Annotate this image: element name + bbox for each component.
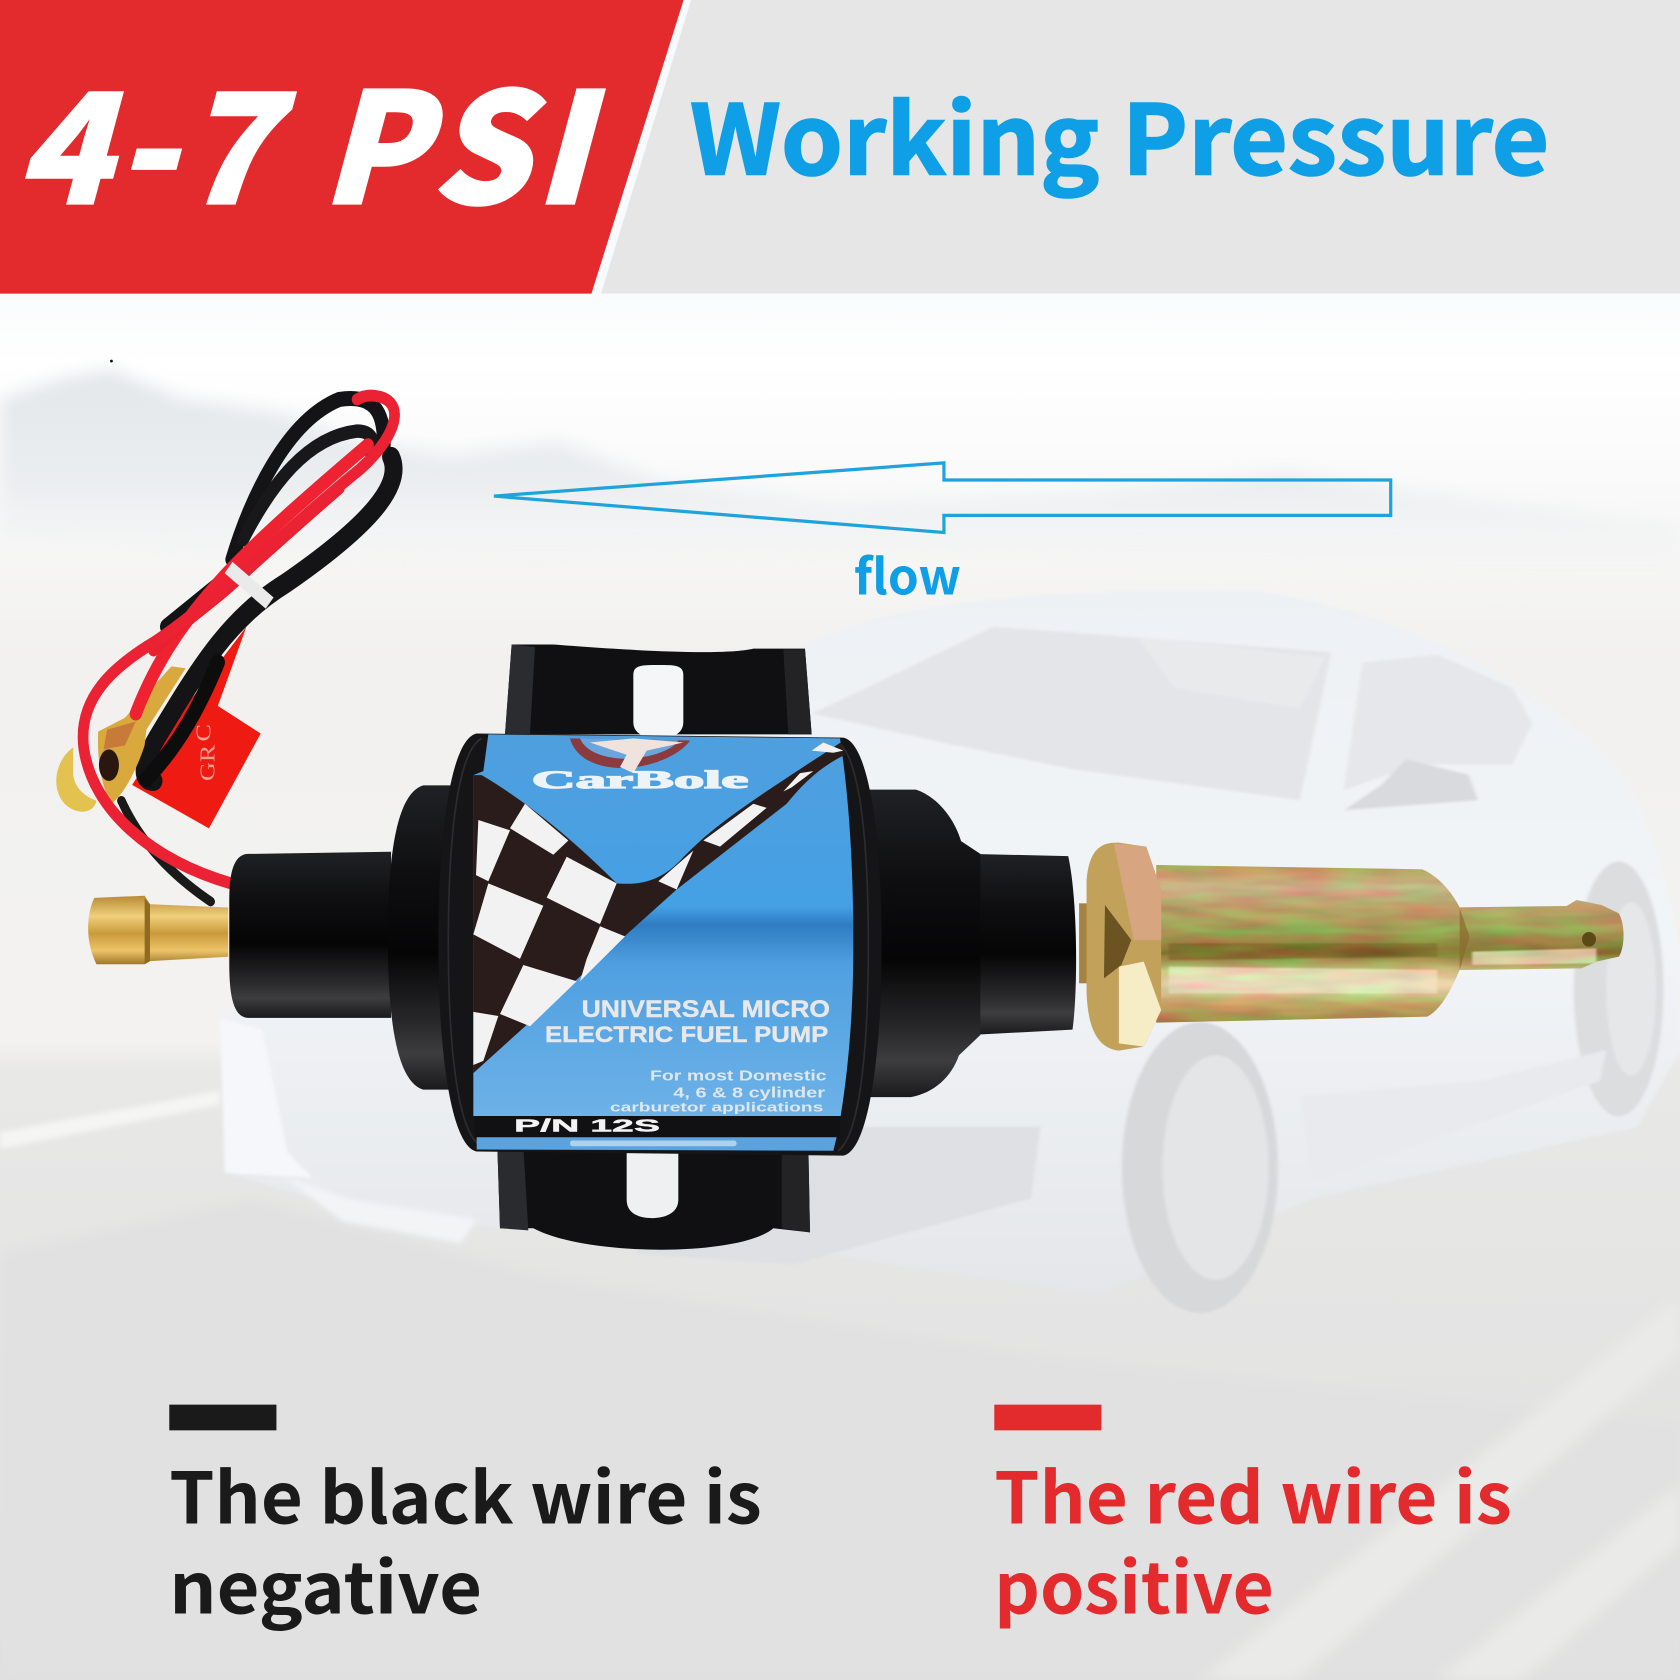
car silhouette: [220, 590, 1680, 1313]
thread: [1079, 903, 1106, 983]
car front white: [220, 1018, 312, 1178]
part number band: P/N 12S: [514, 1117, 660, 1136]
crimp terminal: [98, 666, 186, 803]
white diagonal gap: [591, 0, 691, 294]
legend: red wire: positive: [994, 1533, 1274, 1635]
top bracket: [505, 645, 812, 738]
flag base: [473, 742, 845, 1073]
flow arrow: [494, 463, 1391, 532]
inlet body: [229, 852, 391, 1018]
windshield: [812, 627, 1331, 800]
right collar and neck: [836, 790, 1076, 1097]
product title: [545, 995, 830, 1048]
speck: [110, 360, 113, 362]
ring terminal: [56, 747, 96, 812]
side window: [1344, 655, 1532, 790]
road lane stripes: [1200, 1296, 1680, 1680]
legend: black wire: The black wire is: [169, 1443, 762, 1545]
cable tie: [229, 567, 270, 603]
red badge: [0, 0, 684, 294]
filter can and stem: [1156, 865, 1624, 1023]
front splitter: [284, 1176, 477, 1243]
emblem: [570, 738, 690, 773]
legend: red wire: [994, 1405, 1512, 1635]
product note: 4, 6 & 8 cylinder: [673, 1085, 826, 1101]
road stripes left: [0, 1198, 1680, 1680]
mirror: [1344, 759, 1478, 810]
side sill: [1300, 1050, 1606, 1183]
bottom bracket: [497, 1147, 810, 1250]
cylinder rims: [438, 734, 882, 1156]
thin black lead: [121, 801, 211, 902]
top banner: [0, 0, 1680, 294]
outlet fuel filter: [1079, 843, 1629, 1051]
product note: [610, 1067, 827, 1115]
left collar: [388, 785, 455, 1090]
brand: CarBole: [532, 765, 748, 794]
flag white checks: [473, 742, 843, 1065]
red tag: GR: [196, 745, 220, 781]
pump label group: [438, 645, 882, 1250]
fuel pump: [88, 645, 1629, 1250]
mountains: [0, 370, 1680, 600]
rear wheel: [1574, 861, 1664, 1117]
flow label: flow: [854, 539, 961, 610]
product title: UNIVERSAL MICRO: [582, 995, 830, 1022]
blue label: [473, 734, 853, 1116]
grille: [612, 1127, 1041, 1265]
red tag: [132, 627, 261, 828]
wiring harness: [56, 396, 395, 902]
filter colour mottling: [1156, 863, 1629, 1027]
product title: ELECTRIC FUEL PUMP: [545, 1022, 828, 1048]
black wire loop: [232, 399, 384, 560]
rim grooves: [448, 738, 868, 1151]
legend: red wire: The red wire is: [994, 1443, 1512, 1545]
part number band: [475, 1116, 840, 1151]
product note: For most Domestic: [650, 1067, 827, 1084]
inlet brass fitting: [88, 896, 228, 964]
product note: carburetor applications: [610, 1099, 824, 1115]
legend: black wire: negative: [169, 1533, 482, 1635]
hex nut: [1087, 843, 1161, 1051]
headline: 4-7 PSI: 4-7 PSI: [4, 26, 635, 248]
red wires: [136, 445, 368, 714]
red tag: C: [193, 724, 216, 741]
front wheel: [1122, 1022, 1278, 1313]
legend: black wire: [169, 1405, 762, 1635]
headline: Working Pressure: Working Pressure: [690, 63, 1549, 203]
